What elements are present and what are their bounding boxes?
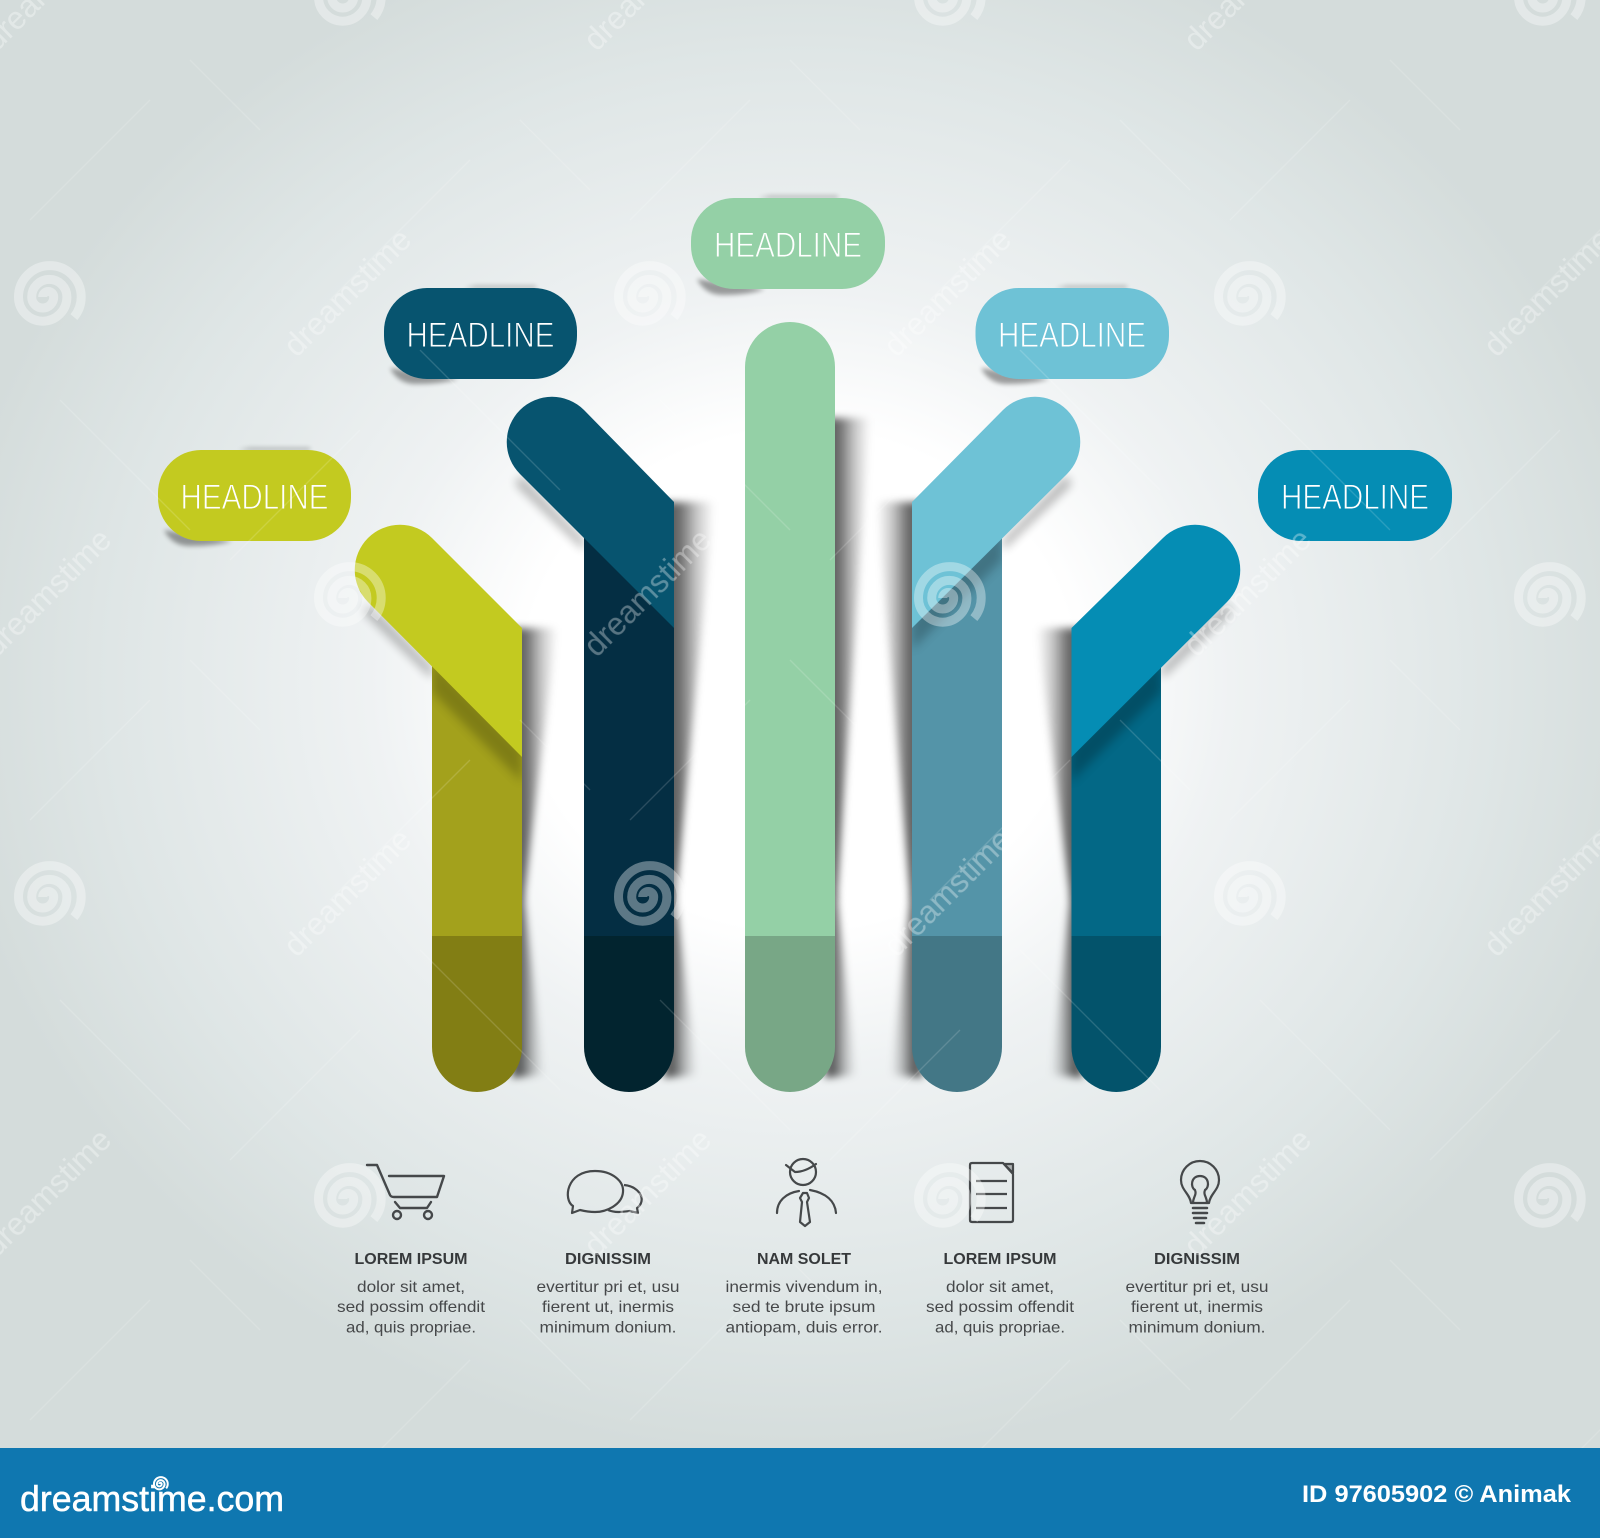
caption 4: ad, quis propriae. (935, 1320, 1065, 1336)
headline pill 2: HEADLINE (406, 316, 554, 355)
icon: document (970, 1163, 1013, 1222)
caption 3: sed te brute ipsum (732, 1299, 876, 1316)
headline pill 1 (158, 450, 351, 541)
watermark overlay: dreamstime (1176, 521, 1318, 663)
bar 2: dark navy (507, 397, 674, 1092)
shadows behind bars (364, 418, 1231, 1078)
caption 2 (536, 1251, 680, 1336)
pill shadows (164, 196, 1127, 546)
watermark overlay: dreamstime (576, 521, 718, 663)
icon: shopping cart (367, 1165, 444, 1219)
icon: person with tie (777, 1159, 836, 1226)
footer bar (0, 1448, 1600, 1538)
caption 5: minimum donium. (1128, 1320, 1266, 1336)
caption 5: fierent ut, inermis (1131, 1299, 1263, 1316)
caption 1 (337, 1251, 486, 1336)
caption 1: ad, quis propriae. (346, 1320, 476, 1336)
headline pill 4 (976, 288, 1169, 379)
caption 5: evertitur pri et, usu (1126, 1279, 1268, 1296)
caption 3 (726, 1251, 882, 1336)
caption 4 (926, 1251, 1075, 1336)
watermark overlay: dreamstime (276, 221, 418, 363)
headline pill 3: HEADLINE (714, 226, 862, 265)
caption 4: sed possim offendit (926, 1299, 1075, 1316)
footer logo text: dreamstime.com (20, 1478, 284, 1519)
headline pill 3 (691, 198, 885, 289)
arm 1 (355, 525, 522, 757)
watermark overlay: dreamstime (876, 221, 1018, 363)
watermark overlay: dreamstime (1176, 1121, 1318, 1263)
arm 5 (1072, 525, 1240, 757)
watermark overlay: dreamstime (576, 1121, 718, 1263)
headline pill 5 (1258, 450, 1452, 541)
caption 4: LOREM IPSUM (944, 1251, 1056, 1268)
footer image id: ID 97605902 © Animak (1302, 1481, 1572, 1508)
bar 1: olive (355, 525, 522, 1092)
caption 2: minimum donium. (540, 1320, 676, 1336)
watermark overlay: dreamstime (876, 821, 1018, 963)
caption 2: evertitur pri et, usu (536, 1279, 680, 1296)
bar 4: light blue (912, 397, 1080, 1092)
headline pill 5: HEADLINE (1281, 478, 1429, 517)
bar 5: teal (1071, 525, 1240, 1092)
caption 1: LOREM IPSUM (354, 1251, 468, 1268)
arm 2 (507, 397, 674, 628)
icon: logo spiral (154, 1477, 168, 1489)
headline pill 4: HEADLINE (998, 316, 1146, 355)
caption 5: DIGNISSIM (1154, 1251, 1240, 1268)
headline pill 2 (384, 288, 577, 379)
caption 1: dolor sit amet, (357, 1279, 465, 1296)
caption 1: sed possim offendit (337, 1299, 486, 1316)
caption 4: dolor sit amet, (946, 1279, 1054, 1296)
caption 2: DIGNISSIM (565, 1251, 651, 1268)
caption 2: fierent ut, inermis (542, 1299, 674, 1316)
watermark overlay: dreamstime (276, 821, 418, 963)
caption 3: NAM SOLET (757, 1251, 851, 1268)
bar 3: mint (745, 322, 835, 1092)
headline pill 1: HEADLINE (180, 478, 328, 517)
icon: speech bubbles (568, 1171, 642, 1213)
caption 3: antiopam, duis error. (726, 1320, 882, 1336)
caption 5 (1126, 1251, 1268, 1336)
caption 3: inermis vivendum in, (726, 1279, 882, 1296)
arm 4 (912, 397, 1080, 628)
icon: light bulb (1181, 1161, 1219, 1223)
